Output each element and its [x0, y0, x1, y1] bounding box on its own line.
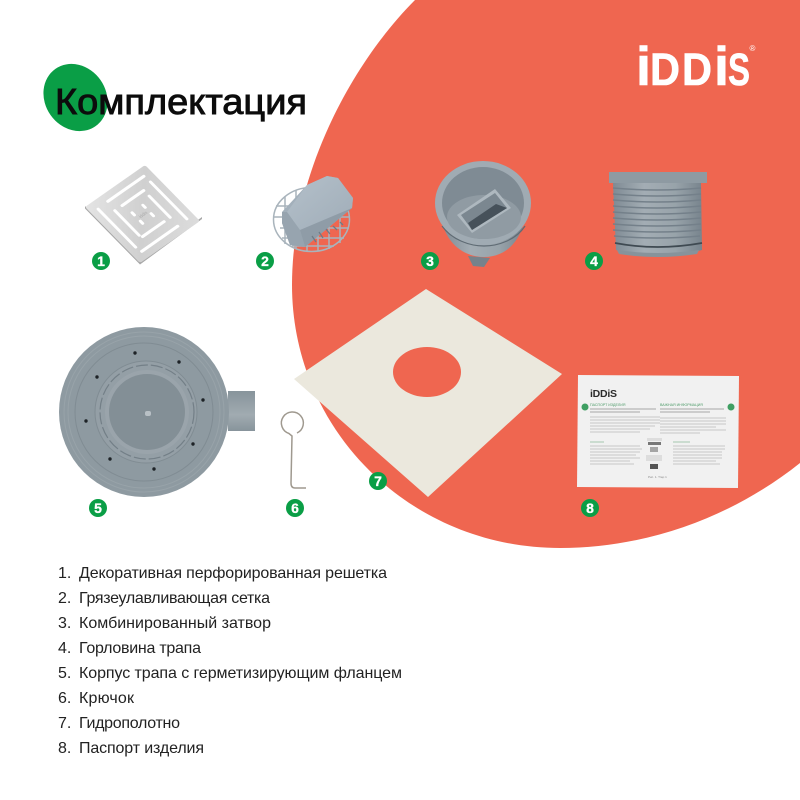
item 1: decorative grate: iddis [138, 210, 149, 219]
list item 7: 7. [58, 715, 71, 732]
badge 2 [256, 252, 274, 270]
background red shape [292, 0, 800, 548]
item 4: drain neck [609, 172, 707, 257]
brand logo: S [728, 44, 750, 95]
brand logo: i [714, 35, 729, 97]
title text: Комплектация [55, 81, 307, 122]
item 7: waterproofing membrane [294, 289, 562, 497]
item 8: product passport [577, 375, 739, 488]
badge 8: 8 [586, 500, 594, 516]
passport heading left: ПАСПОРТ ИЗДЕЛИЯ [590, 403, 626, 407]
title [30, 51, 307, 144]
badge 6: 6 [291, 500, 299, 516]
list item 5: Корпус трапа с герметизирующим фланцем [79, 665, 402, 682]
badge 3: 3 [426, 253, 434, 269]
list item 8: 8. [58, 740, 71, 757]
list item 1: 1. [58, 565, 71, 582]
list item 2: Грязеулавливающая сетка [79, 590, 270, 607]
brand logo: D [650, 44, 680, 95]
badge 8 [581, 499, 599, 517]
list item 4: Горловина трапа [79, 640, 201, 657]
list item 2: 2. [58, 590, 71, 607]
green title blob [30, 51, 121, 144]
item 5: drain body with flange [59, 327, 255, 497]
list item 6: 6. [58, 690, 71, 707]
number badges [89, 252, 603, 517]
item 6: hook [281, 412, 306, 488]
passport caption: Рис. 1. Trap 1 [648, 475, 667, 479]
badge 5 [89, 499, 107, 517]
parts list [58, 565, 402, 757]
brand logo: i [636, 35, 651, 97]
list item 3: 3. [58, 615, 71, 632]
badge 4 [585, 252, 603, 270]
badge 3 [421, 252, 439, 270]
badge 6 [286, 499, 304, 517]
list item 6: Крючок [79, 690, 135, 707]
badge 5: 5 [94, 500, 102, 516]
badge 7: 7 [374, 473, 382, 489]
brand logo: D [682, 44, 712, 95]
list item 3: Комбинированный затвор [79, 615, 271, 632]
badge 7 [369, 472, 387, 490]
list item 8: Паспорт изделия [79, 740, 204, 757]
list item 4: 4. [58, 640, 71, 657]
passport logo: iDDiS [590, 388, 617, 400]
badge 2: 2 [261, 253, 269, 269]
brand logo: ® [750, 44, 756, 53]
item 1: decorative grate [85, 165, 202, 264]
passport heading right: ВАЖНАЯ ИНФОРМАЦИЯ [660, 403, 703, 407]
list item 1: Декоративная перфорированная решетка [79, 565, 387, 582]
passport badges [582, 404, 734, 410]
badge 1 [92, 252, 110, 270]
badge 1: 1 [97, 253, 105, 269]
badge 4: 4 [590, 253, 598, 269]
item 3: combined trap [435, 161, 531, 267]
brand logo [636, 35, 756, 97]
item 2: dirt-catching mesh [274, 176, 353, 252]
list item 7: Гидрополотно [79, 715, 180, 732]
list item 5: 5. [58, 665, 71, 682]
